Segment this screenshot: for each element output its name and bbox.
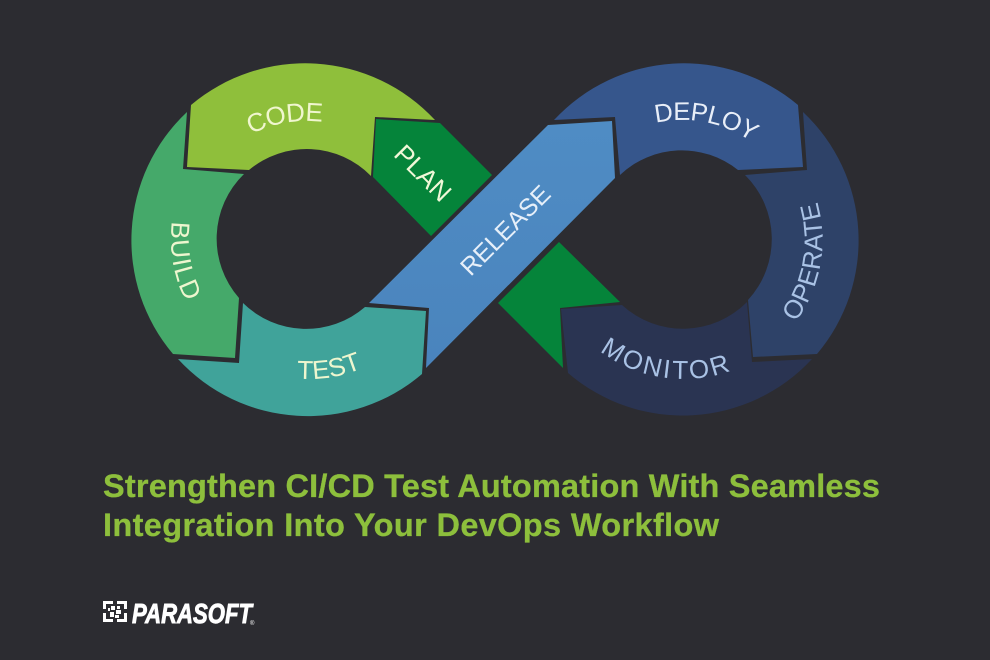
heading: Integration Into Your DevOps Workflow — [103, 507, 720, 543]
segment: plan: PLAN — [388, 138, 458, 208]
segment: plan — [373, 119, 492, 236]
segment: operate — [745, 112, 859, 357]
segment: deploy — [554, 63, 803, 175]
segment: operate: OPERATE — [784, 202, 823, 318]
segment: monitor — [561, 302, 812, 416]
heading — [103, 468, 880, 543]
logo wordmark: PARASOFT — [132, 598, 254, 629]
segment: release — [369, 121, 615, 368]
segment: build: BUILD — [171, 223, 199, 298]
segment: deploy: DEPLOY — [655, 102, 760, 138]
icon: Parasoft mark — [103, 601, 127, 622]
segment: test — [178, 303, 426, 416]
heading: Strengthen CI/CD Test Automation With Seamless — [103, 468, 880, 504]
segment: code: CODE — [248, 102, 322, 132]
segment: test: TEST — [298, 352, 356, 379]
logo: Parasoft — [103, 598, 255, 629]
segment: monitor: MONITOR — [601, 337, 730, 379]
infinity loop diagram — [131, 63, 859, 416]
segment: plan lower arrow tail — [498, 242, 620, 368]
segment: build — [131, 112, 244, 358]
registered mark: ® — [250, 620, 255, 627]
segment: code — [187, 63, 435, 176]
segment: release: RELEASE — [455, 180, 556, 281]
